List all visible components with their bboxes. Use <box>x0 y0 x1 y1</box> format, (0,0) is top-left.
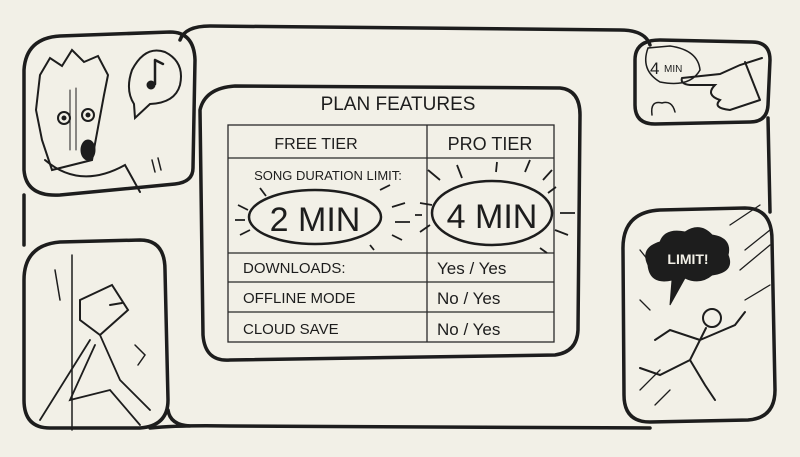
panel: center plan features: FREE TIER <box>274 136 358 153</box>
panel: bottom-right LIMIT runner <box>623 205 775 422</box>
panel: center plan features: OFFLINE MODE <box>243 290 356 307</box>
callout: LIMIT cloud <box>646 228 730 305</box>
panel: center plan features: PRO TIER <box>448 134 532 154</box>
panel: center plan features: SONG DURATION LIMIT: <box>254 168 402 183</box>
panel: center plan features: DOWNLOADS: <box>243 260 346 277</box>
panel: center plan features: Yes / Yes <box>437 259 506 278</box>
panel: top-right finger pointing 4 min: 4 <box>650 59 659 78</box>
panel: top-right finger pointing 4 min: MIN <box>664 64 682 75</box>
panel: bottom-left running character <box>24 240 168 430</box>
panel: top-left scared character <box>24 32 195 195</box>
callout: LIMIT cloud: LIMIT! <box>667 251 709 267</box>
panel: center plan features: CLOUD SAVE <box>243 321 339 338</box>
title: PLAN FEATURES <box>321 94 475 115</box>
panel: center plan features: No / Yes <box>437 320 500 339</box>
panel: top-right finger pointing 4 min <box>635 40 770 124</box>
callout: 2 min: 2 MIN <box>270 201 360 239</box>
table <box>228 125 554 342</box>
callout: 2 min <box>235 185 410 250</box>
icon: music note bubble <box>129 50 181 118</box>
callout: 4 min <box>415 160 575 253</box>
callout: 4 min: 4 MIN <box>447 198 537 236</box>
panel: center plan features: No / Yes <box>437 289 500 308</box>
panel: center plan features <box>200 86 580 360</box>
